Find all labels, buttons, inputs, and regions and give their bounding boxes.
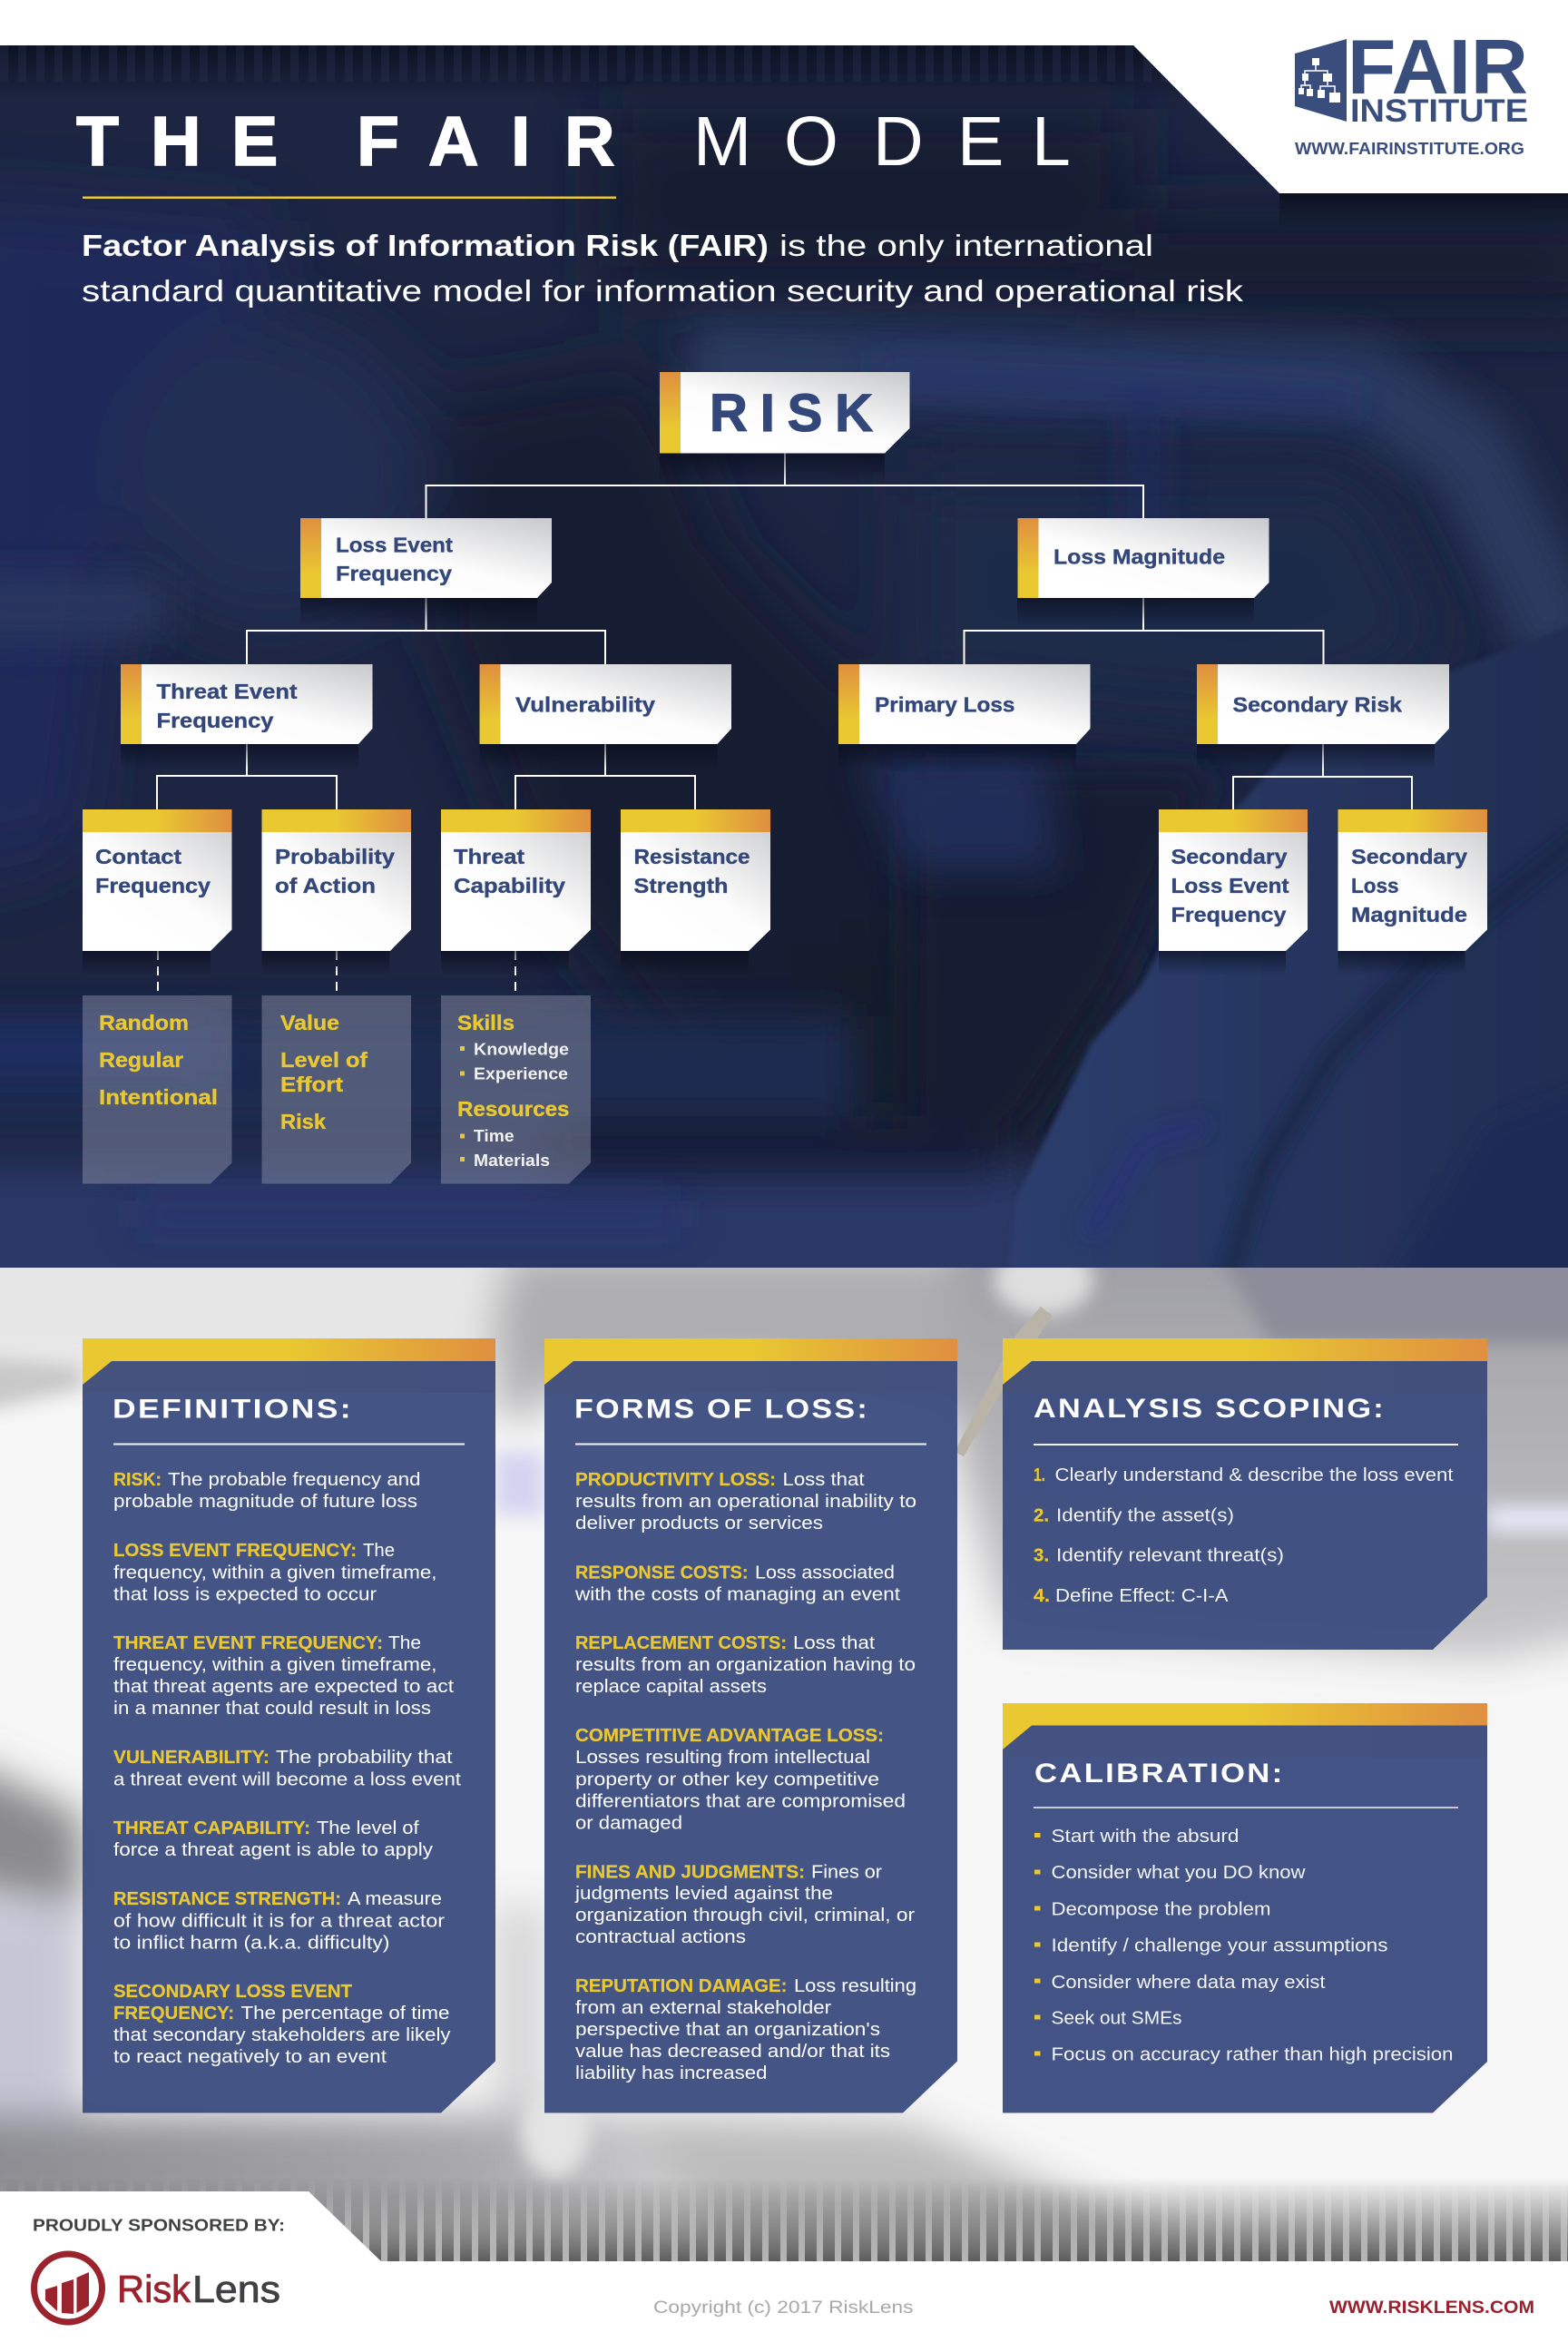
panel: threat capability factors: Knowledge — [474, 1040, 569, 1058]
node: Secondary Loss Event Frequency: Frequency — [1171, 903, 1287, 926]
definition: secondary loss event frequency: SECONDARY LOSS EVENT — [113, 1982, 352, 2002]
panel: contact frequency factors — [83, 995, 232, 1183]
node: Contact Frequency: Frequency — [95, 874, 211, 897]
definition: loss event frequency: The — [363, 1541, 395, 1561]
definition: secondary loss event frequency: that secondary stakeholders are likely — [113, 2025, 450, 2045]
definition: threat event frequency: frequency, within a given timeframe, — [113, 1655, 436, 1675]
panel: threat capability factors: Time — [474, 1127, 514, 1145]
bullet list: calibration tips: Consider where data may exist — [1051, 1973, 1326, 1993]
definition: risk: The probable frequency and — [168, 1470, 421, 1490]
numbered list: scoping steps: 4. — [1034, 1586, 1050, 1606]
subtitle: is the only international — [779, 229, 1153, 262]
subtitle: Factor Analysis of Information Risk (FAIR) — [82, 229, 769, 262]
panel: analysis scoping — [1003, 1338, 1487, 1650]
bullet list: calibration tips: Focus on accuracy rather than high precision — [1051, 2045, 1454, 2065]
node: Resistance Strength: Resistance — [633, 845, 750, 868]
panel: calibration — [1003, 1703, 1487, 2112]
node: Vulnerability: Vulnerability — [515, 693, 655, 717]
node: Threat Event Frequency — [121, 664, 372, 769]
title underline — [83, 196, 616, 199]
logo wordmark FAIR: FAIR — [1348, 24, 1528, 111]
form: productivity loss: Loss that — [782, 1470, 865, 1490]
node: Secondary Loss Magnitude: Loss — [1351, 874, 1399, 897]
node: Loss Event Frequency: Frequency — [336, 562, 452, 585]
bullet list: calibration tips: Seek out SMEs — [1051, 2009, 1181, 2029]
form: competitive advantage loss: COMPETITIVE ADVANTAGE LOSS: — [575, 1726, 884, 1746]
node: Vulnerability — [479, 664, 731, 769]
light photo background — [0, 1180, 1568, 2261]
form: replacement costs — [575, 1633, 916, 1697]
title: THE FAIR — [76, 103, 615, 181]
panel: probability of action factors: Level of — [280, 1048, 368, 1072]
node: Resistance Strength — [621, 809, 770, 975]
panel: probability of action factors: Risk — [280, 1110, 326, 1133]
hand silhouette — [1006, 608, 1568, 1289]
form: replacement costs: REPLACEMENT COSTS: — [575, 1633, 787, 1653]
node: Secondary Loss Event Frequency: Loss Event — [1171, 874, 1289, 897]
numbered list: scoping steps: Clearly understand & describe the loss event — [1054, 1465, 1454, 1485]
form: replacement costs: replace capital assets — [575, 1677, 767, 1697]
node: Primary Loss — [838, 664, 1091, 769]
node: Secondary Loss Event Frequency: Secondary — [1171, 845, 1288, 868]
logo panel: FAIR Institute — [1295, 24, 1528, 158]
node: Contact Frequency: Contact — [95, 845, 181, 868]
definition: threat event frequency: in a manner that could result in loss — [113, 1699, 431, 1719]
form: reputation damage: value has decreased and/or that its — [575, 2042, 890, 2062]
title — [76, 103, 1071, 181]
form: response costs: RESPONSE COSTS: — [575, 1563, 748, 1583]
form: reputation damage: from an external stakeholder — [575, 1998, 831, 2018]
form: productivity loss: deliver products or services — [575, 1514, 823, 1534]
panel: threat capability factors: Experience — [474, 1065, 568, 1083]
node: Resistance Strength: Strength — [633, 874, 728, 897]
definition: threat capability: The level of — [317, 1818, 419, 1838]
definition: vulnerability: The probability that — [276, 1748, 453, 1768]
panel: contact frequency factors: Intentional — [99, 1085, 218, 1109]
definition: vulnerability: a threat event will become a loss event — [113, 1769, 461, 1789]
definition: loss event frequency: frequency, within a given timeframe, — [113, 1563, 436, 1583]
node: Contact Frequency — [83, 809, 232, 975]
definition: secondary loss event frequency — [113, 1982, 450, 2067]
subtitle — [82, 229, 1244, 308]
numbered list: scoping steps: Define Effect: C-I-A — [1055, 1586, 1229, 1606]
definition: threat capability: THREAT CAPABILITY: — [113, 1818, 310, 1838]
node: Secondary Loss Magnitude: Magnitude — [1351, 903, 1467, 926]
form: fines and judgments: contractual actions — [575, 1927, 746, 1947]
form: competitive advantage loss: differentiators that are compromised — [575, 1791, 906, 1811]
panel: forms of loss — [544, 1338, 957, 2112]
panel: threat capability factors: Materials — [474, 1152, 550, 1170]
form: replacement costs: Loss that — [793, 1633, 875, 1653]
node: Secondary Loss Event Frequency — [1159, 809, 1308, 975]
definition: loss event frequency: that loss is expected to occur — [113, 1584, 377, 1604]
form: fines and judgments: Fines or — [811, 1862, 882, 1882]
node: Threat Capability: Capability — [454, 874, 565, 897]
node: Secondary Risk: Secondary Risk — [1232, 693, 1402, 717]
node: Loss Event Frequency — [300, 518, 552, 625]
bullet list: calibration tips: Consider what you DO know — [1051, 1863, 1306, 1883]
panel: probability of action factors — [261, 995, 411, 1183]
node: Secondary Loss Magnitude — [1338, 809, 1487, 975]
panel: probability of action factors: Value — [280, 1011, 339, 1034]
node: RISK: RISK — [710, 384, 873, 443]
icon: RiskLens lens and bars — [34, 2254, 102, 2322]
definition: threat event frequency: The — [388, 1633, 421, 1653]
definition: threat capability: force a threat agent is able to apply — [113, 1840, 433, 1860]
bullet list: calibration tips: Start with the absurd — [1051, 1827, 1240, 1847]
node: Probability of Action — [261, 809, 411, 975]
website url: WWW.RISKLENS.COM — [1329, 2298, 1534, 2318]
logo wordmark INSTITUTE: INSTITUTE — [1350, 93, 1528, 129]
definition: threat event frequency: THREAT EVENT FREQUENCY: — [113, 1633, 383, 1653]
wordmark: Risk: Risk — [117, 2268, 191, 2310]
form: competitive advantage loss: property or other key competitive — [575, 1769, 879, 1789]
definition: resistance strength: RESISTANCE STRENGTH: — [113, 1889, 341, 1909]
form: reputation damage — [575, 1976, 916, 2083]
definition: threat event frequency — [113, 1633, 455, 1719]
numbered list: scoping steps: 2. — [1034, 1506, 1049, 1526]
heading: calibration: CALIBRATION: — [1034, 1759, 1285, 1788]
node: Secondary Risk — [1197, 664, 1449, 769]
node: RISK — [660, 372, 909, 484]
numbered list: scoping steps: 1. — [1034, 1465, 1045, 1485]
definition: loss event frequency — [113, 1541, 436, 1604]
subtitle: standard quantitative model for information security and operational risk — [82, 274, 1244, 308]
definition: secondary loss event frequency: FREQUENCY: — [113, 2004, 234, 2024]
form: fines and judgments: judgments levied against the — [574, 1884, 833, 1904]
panel: probability of action factors: Effort — [280, 1073, 343, 1096]
form: response costs — [574, 1563, 900, 1604]
title: MODEL — [693, 103, 1071, 181]
node: Loss Magnitude: Loss Magnitude — [1054, 544, 1225, 568]
panel: contact frequency factors: Regular — [99, 1048, 183, 1072]
form: productivity loss: results from an operational inability to — [575, 1492, 916, 1512]
panel: contact frequency factors: Random — [99, 1011, 189, 1034]
node: Threat Event Frequency: Threat Event — [156, 680, 298, 703]
node: Primary Loss: Primary Loss — [875, 693, 1014, 717]
numbered list: scoping steps: 3. — [1034, 1546, 1049, 1566]
panel: threat capability factors — [441, 995, 591, 1183]
panel: threat capability factors: Skills — [457, 1011, 514, 1034]
icon: FAIR org chart cube — [1295, 39, 1347, 122]
definition: resistance strength: A measure — [348, 1889, 442, 1909]
definition: secondary loss event frequency: to react negatively to an event — [113, 2047, 387, 2067]
form: productivity loss — [575, 1470, 916, 1534]
bullet list: calibration tips — [1034, 1827, 1454, 2065]
numbered list: scoping steps — [1034, 1465, 1454, 1606]
node: Probability of Action: Probability — [275, 845, 395, 868]
form: replacement costs: results from an organization having to — [575, 1655, 916, 1675]
form: fines and judgments: FINES AND JUDGMENTS: — [575, 1862, 805, 1882]
form: competitive advantage loss — [575, 1726, 906, 1833]
definition: resistance strength: of how difficult it is for a threat actor — [113, 1911, 445, 1931]
copyright: Copyright (c) 2017 RiskLens — [653, 2298, 913, 2318]
panel: definitions — [83, 1338, 495, 2112]
panel: threat capability factors: Resources — [457, 1097, 570, 1121]
definition: risk — [113, 1470, 421, 1512]
node: Threat Capability: Threat — [454, 845, 524, 868]
definition: risk: RISK: — [113, 1470, 162, 1490]
logo url: WWW.FAIRINSTITUTE.ORG — [1295, 140, 1524, 158]
form: reputation damage: perspective that an organization's — [575, 2020, 880, 2040]
definition: loss event frequency: LOSS EVENT FREQUENCY: — [113, 1541, 357, 1561]
definition: resistance strength: to inflict harm (a.k.a. difficulty) — [113, 1933, 390, 1953]
heading: forms of loss: FORMS OF LOSS: — [574, 1394, 869, 1425]
definition: vulnerability: VULNERABILITY: — [113, 1748, 270, 1768]
definition: resistance strength — [113, 1889, 445, 1953]
definition: threat capability — [113, 1818, 433, 1860]
form: fines and judgments — [574, 1862, 915, 1947]
heading: definitions: DEFINITIONS: — [113, 1394, 353, 1425]
form: productivity loss: PRODUCTIVITY LOSS: — [575, 1470, 776, 1490]
form: fines and judgments: organization through civil, criminal, or — [575, 1906, 915, 1926]
form: reputation damage: liability has increased — [575, 2063, 768, 2083]
heading: analysis scoping: ANALYSIS SCOPING: — [1034, 1394, 1386, 1424]
definition: vulnerability — [113, 1748, 461, 1789]
bullet list: calibration tips: Decompose the problem — [1051, 1900, 1270, 1920]
form: response costs: Loss associated — [755, 1563, 895, 1583]
definition: risk: probable magnitude of future loss — [113, 1492, 417, 1512]
node: Threat Capability — [441, 809, 591, 975]
form: competitive advantage loss: Losses resulting from intellectual — [575, 1748, 870, 1768]
definition: secondary loss event frequency: The percentage of time — [241, 2004, 450, 2024]
wordmark: Lens: Lens — [192, 2268, 280, 2310]
logo: RiskLens — [34, 2254, 280, 2322]
node: Probability of Action: of Action — [275, 874, 376, 897]
numbered list: scoping steps: Identify the asset(s) — [1056, 1506, 1234, 1526]
connector lines — [157, 453, 1412, 995]
node: Loss Event Frequency: Loss Event — [336, 534, 453, 557]
bullet list: calibration tips: Identify / challenge your assumptions — [1051, 1936, 1388, 1956]
node: Threat Event Frequency: Frequency — [156, 709, 274, 732]
definition: threat event frequency: that threat agents are expected to act — [113, 1677, 455, 1697]
form: reputation damage: REPUTATION DAMAGE: — [575, 1976, 788, 1996]
form: response costs: with the costs of managing an event — [574, 1584, 900, 1604]
node: Loss Magnitude — [1017, 518, 1269, 625]
footer white band — [0, 2191, 1568, 2352]
form: reputation damage: Loss resulting — [794, 1976, 916, 1996]
form: competitive advantage loss: or damaged — [575, 1813, 682, 1833]
numbered list: scoping steps: Identify relevant threat(s) — [1056, 1546, 1284, 1566]
sponsor label: PROUDLY SPONSORED BY: — [33, 2216, 285, 2234]
node: Secondary Loss Magnitude: Secondary — [1351, 845, 1467, 868]
dark photo background — [0, 45, 1568, 1325]
